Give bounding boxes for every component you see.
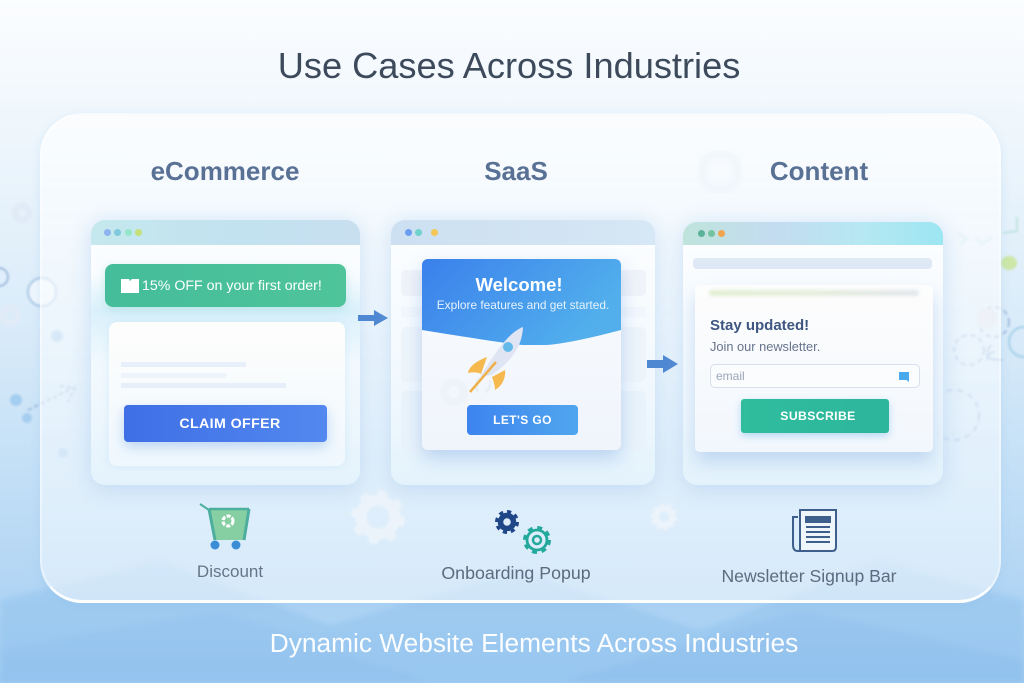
offer card <box>109 322 345 466</box>
button: let's go <box>467 405 578 435</box>
title: Use Cases Across Industries <box>278 45 740 86</box>
heading: SaaS: SaaS <box>484 156 548 186</box>
email input <box>710 364 920 388</box>
arrow: SaaS to Content <box>647 355 678 373</box>
button: subscribe <box>741 399 889 433</box>
button: claim offer: CLAIM OFFER <box>179 416 281 432</box>
panel: Content window <box>683 222 943 485</box>
placeholder text lines <box>121 362 286 388</box>
arrow: eCommerce to SaaS <box>358 310 388 326</box>
window title bar <box>683 222 943 245</box>
window title bar <box>91 220 360 245</box>
placeholder page blocks <box>401 270 646 328</box>
icon: newspaper <box>792 509 837 552</box>
icon: shopping cart <box>200 503 250 550</box>
button: claim offer <box>124 405 327 442</box>
window dots <box>104 229 142 236</box>
popup heading: Welcome! <box>475 274 563 295</box>
button: subscribe: SUBSCRIBE <box>780 409 856 423</box>
panel: eCommerce window <box>91 220 360 485</box>
input placeholder: email <box>716 369 745 383</box>
panel: SaaS window <box>391 220 655 485</box>
heading: eCommerce: eCommerce <box>151 156 299 186</box>
icon: gears <box>495 510 551 554</box>
card subtext: Join our newsletter. <box>710 339 820 354</box>
blurred card accent <box>709 290 919 296</box>
window dots <box>698 230 725 237</box>
soft glow behind card <box>91 275 360 365</box>
heading: Content: Content <box>770 156 868 186</box>
icon: chat <box>899 372 909 382</box>
icon: rocket <box>468 327 523 393</box>
popup subtext: Explore features and get started. <box>437 298 609 312</box>
popup background gear <box>437 375 471 409</box>
main glass panel <box>40 113 1001 603</box>
label: Discount: Discount <box>197 562 263 581</box>
button: let's go: LET'S GO <box>493 413 552 427</box>
welcome popup <box>422 259 621 450</box>
popup header <box>422 259 621 345</box>
label: Onboarding Popup: Onboarding Popup <box>441 563 591 583</box>
banner text: 15% OFF on your first order! <box>142 278 322 294</box>
placeholder bar <box>693 258 932 269</box>
window title bar <box>391 220 655 245</box>
footer caption: Dynamic Website Elements Across Industries <box>270 628 798 658</box>
icon: book <box>121 279 139 293</box>
discount banner <box>105 264 346 307</box>
label: Newsletter Signup Bar: Newsletter Signup Bar <box>721 566 897 586</box>
card heading: Stay updated! <box>710 317 809 334</box>
newsletter card <box>695 285 933 452</box>
window dots <box>405 229 438 236</box>
